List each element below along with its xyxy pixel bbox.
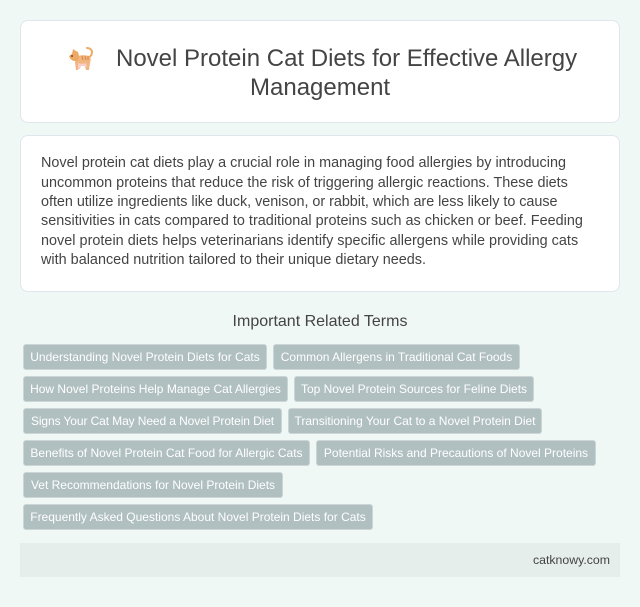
heading: related terms: Important Related Terms <box>233 313 407 330</box>
tag list: How Novel Proteins Help Manage Cat Allergies <box>30 382 281 396</box>
text block: description: Novel protein cat diets play a crucial role in managing food allergies by introducing <box>41 155 566 171</box>
text block: description: uncommon proteins that reduce the risk of triggering allergic reactions. These diets <box>41 175 568 191</box>
tag list: Common Allergens in Traditional Cat Foods <box>281 350 512 364</box>
icon: cat <box>69 47 93 70</box>
tag list: Vet Recommendations for Novel Protein Diets <box>31 478 275 492</box>
tag list: Potential Risks and Precautions of Novel Proteins <box>324 446 588 460</box>
footer <box>20 543 620 577</box>
panel: title card <box>20 20 620 123</box>
tag list: Benefits of Novel Protein Cat Food for Allergic Cats <box>30 446 303 460</box>
title: Management <box>250 74 390 101</box>
tag list: Frequently Asked Questions About Novel Protein Diets for Cats <box>30 510 366 524</box>
tag list <box>23 344 596 530</box>
tag list: Signs Your Cat May Need a Novel Protein Diet <box>31 414 274 428</box>
text block: description: novel protein diets helps veterinarians identify specific allergens while providing cats <box>41 233 578 249</box>
text block: description: often utilize ingredients like duck, venison, or rabbit, which are less likely to cause <box>41 194 558 210</box>
text block: description <box>41 155 583 268</box>
tag list: Transitioning Your Cat to a Novel Protein Diet <box>294 414 536 428</box>
footer: catknowy.com <box>533 553 610 567</box>
title <box>116 45 577 101</box>
panel: description card <box>20 135 620 292</box>
tag list: Top Novel Protein Sources for Feline Diets <box>301 382 527 396</box>
text block: description: sensitivities in cats compared to traditional proteins such as chicken or beef. Feeding <box>41 213 583 229</box>
tag list: Understanding Novel Protein Diets for Cats <box>30 350 260 364</box>
title: Novel Protein Cat Diets for Effective Allergy <box>116 45 577 72</box>
text block: description: with balanced nutrition tailored to their unique dietary needs. <box>41 252 426 268</box>
